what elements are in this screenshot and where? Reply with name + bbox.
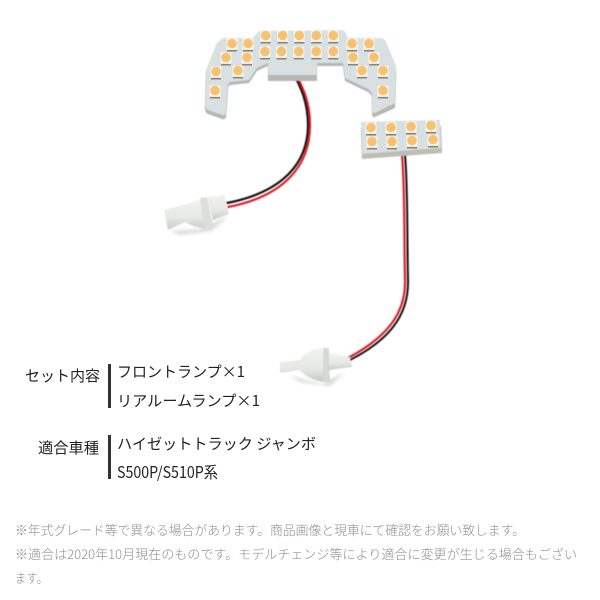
value: front lamp: フロントランプ×1 (117, 361, 245, 382)
rear lamp LED board (361, 120, 442, 159)
wire: front lamp (227, 72, 310, 207)
rear lamp LEDs (366, 120, 438, 150)
compatible vehicle section (38, 433, 316, 483)
footnotes (15, 520, 577, 587)
value: rear room lamp: リアルームランプ×1 (117, 390, 260, 411)
front lamp LED board (205, 30, 396, 119)
set contents section (25, 361, 260, 411)
value: vehicle name: ハイゼットトラック ジャンボ (117, 433, 316, 454)
footnote line 2: ※適合は2020年10月現在のものです。モデルチェンジ等により適合に変更が生じる場合もござい (15, 544, 577, 563)
T10 bulb socket: rear lamp (280, 348, 352, 386)
T10 bulb socket: front lamp (164, 195, 229, 235)
divider bar: compatible vehicle (108, 435, 111, 479)
divider bar: set contents (108, 364, 111, 408)
front lamp LEDs (210, 30, 388, 98)
value: model code: S500P/S510P系 (117, 459, 218, 483)
footnote line 1: ※年式グレード等で異なる場合があります。商品画像と現車にて確認をお願い致します。 (15, 520, 525, 539)
wire: rear lamp (348, 155, 408, 360)
label: set contents: セット内容 (25, 365, 100, 386)
footnote line 3: ます。 (15, 568, 48, 587)
label: compatible vehicle: 適合車種 (38, 437, 99, 458)
